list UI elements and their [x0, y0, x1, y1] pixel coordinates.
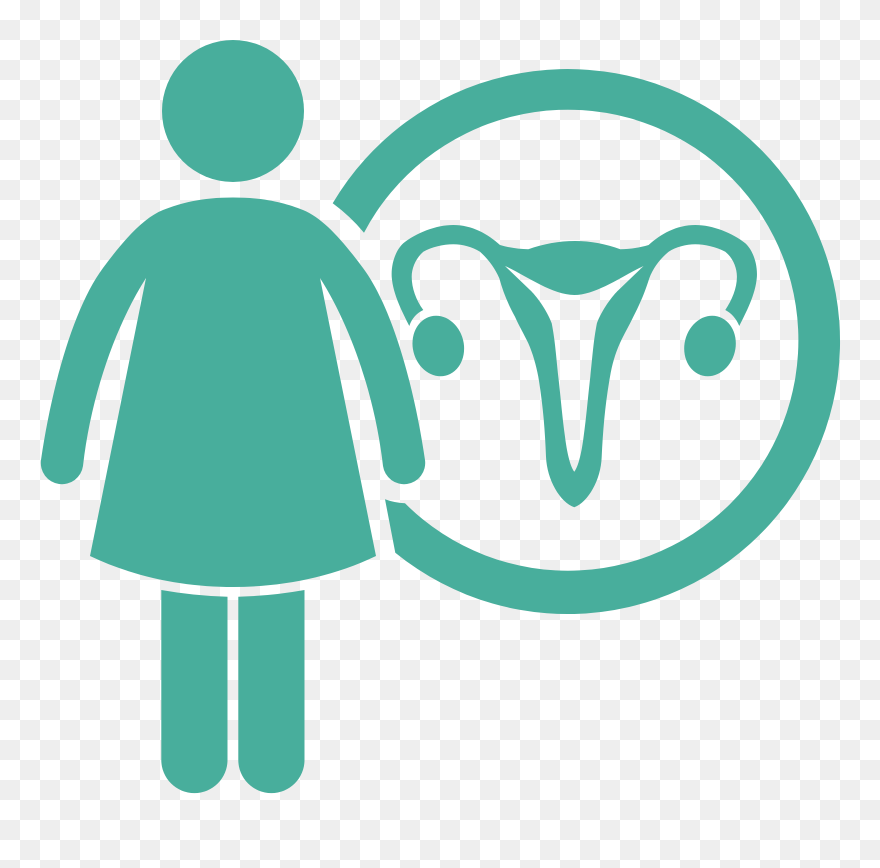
uterus and fallopian tubes — [392, 225, 757, 507]
left leg — [161, 590, 228, 793]
body with dress and arms — [41, 198, 425, 587]
icon: woman figure — [41, 40, 425, 793]
right ovary — [678, 310, 742, 382]
icon: uterus — [392, 225, 757, 507]
left ovary — [406, 310, 470, 382]
right leg — [238, 590, 304, 793]
head — [162, 40, 304, 182]
icon: open ring around uterus — [333, 69, 840, 614]
